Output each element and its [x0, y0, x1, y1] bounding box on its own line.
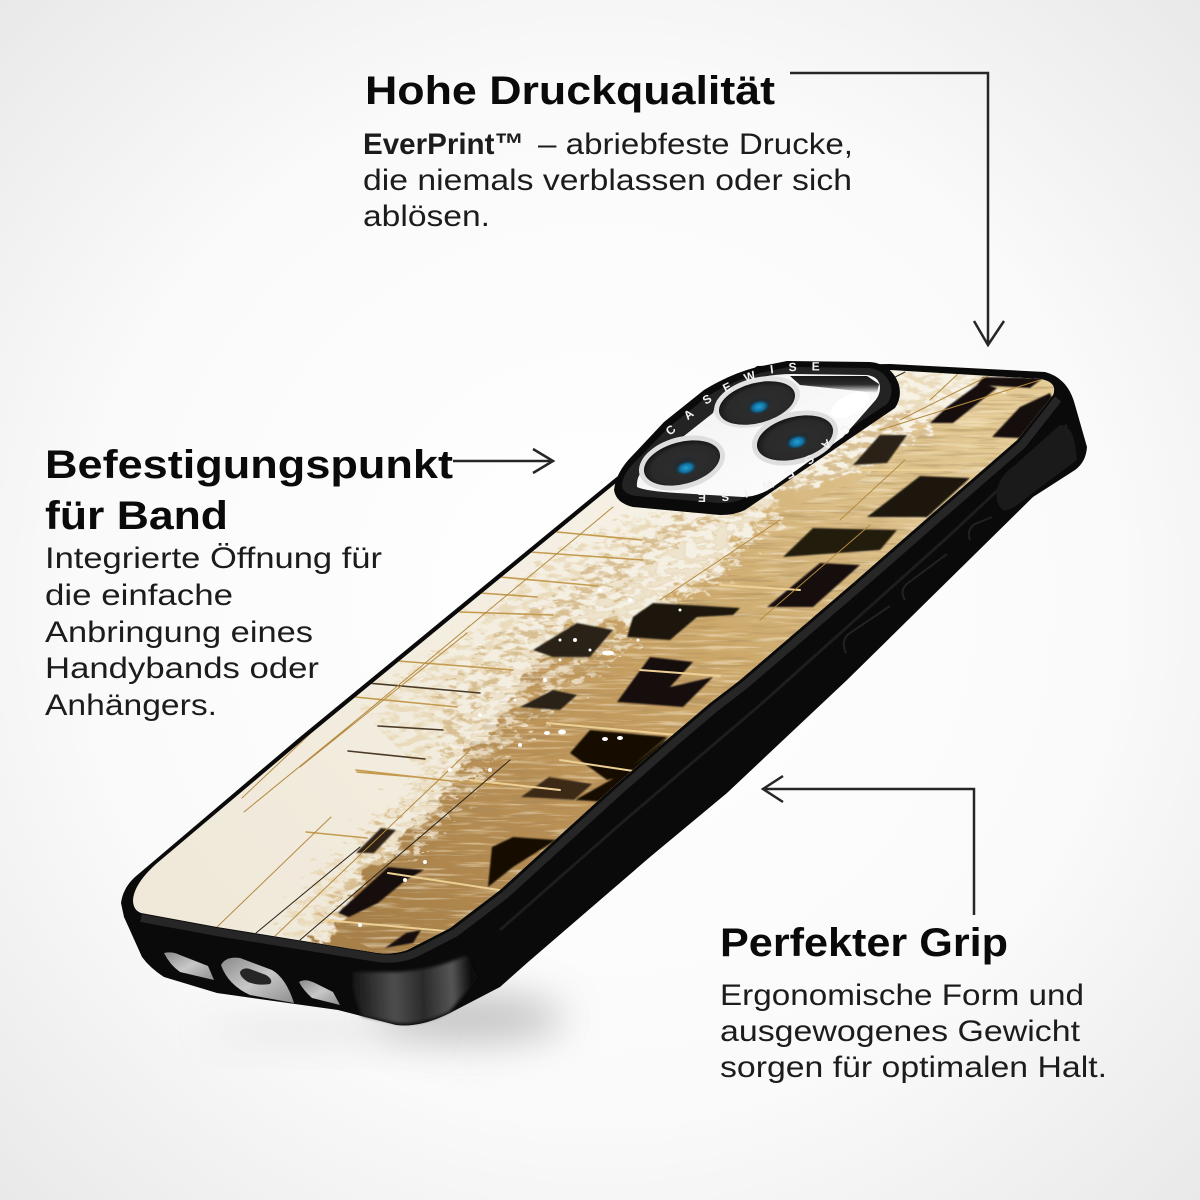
camera bump	[614, 361, 900, 515]
dark blocks	[338, 377, 1053, 948]
dark horizontal strokes	[348, 683, 480, 759]
heading: Befestigungspunkt für Band	[45, 443, 453, 538]
light streaks	[330, 380, 1070, 970]
charging port	[221, 958, 294, 1003]
text block: Befestigungspunkt: Handybands oder	[45, 652, 319, 685]
window top shadow	[790, 376, 879, 393]
text block: Befestigungspunkt: Integrierte Öffnung für	[45, 542, 382, 575]
bump frame	[614, 361, 900, 515]
side band next to the art	[141, 399, 1058, 959]
side buttons	[844, 517, 992, 653]
ring text bottom: CASEWISE	[698, 427, 850, 502]
text block: Perfekter Grip	[720, 979, 1107, 1084]
white flecks over the paint edge	[380, 490, 790, 860]
clear lens window	[637, 374, 880, 497]
side grip	[997, 425, 1077, 510]
white paint splatter	[358, 588, 682, 927]
brown streaks	[330, 380, 1070, 970]
gold paint area	[300, 365, 1070, 970]
heading: Perfekter Grip: Perfekter Grip	[720, 921, 1008, 965]
arrow: strap attachment	[453, 449, 553, 473]
text block: EverPrint: ablösen.	[363, 200, 490, 233]
top lens	[708, 367, 806, 437]
text block: Befestigungspunkt: die einfache	[45, 579, 233, 612]
side groove	[500, 425, 1067, 930]
volume up	[903, 554, 947, 600]
text block: Perfekter Grip: ausgewogenes Gewicht	[720, 1015, 1081, 1048]
gold and dark thin lines	[217, 372, 1040, 940]
pale transition paint	[280, 370, 1070, 960]
bump top bevel	[622, 367, 892, 503]
left speaker	[164, 952, 214, 980]
text block: EverPrint	[363, 128, 853, 233]
right speaker	[299, 980, 340, 1005]
heading: Befestigungspunkt für Band: Befestigungspunkt	[45, 443, 453, 487]
gold horizontal strokes	[306, 532, 643, 838]
cream base	[133, 370, 1054, 954]
text block: EverPrint: die niemals verblassen oder sich	[363, 164, 852, 197]
text block: Befestigungspunkt: Anbringung eines	[45, 616, 313, 649]
text block: Perfekter Grip: sorgen für optimalen Halt.	[720, 1051, 1107, 1084]
right lens	[746, 401, 844, 475]
ring text top: CASEWISE	[666, 362, 820, 434]
phone artwork	[133, 370, 1054, 954]
case body	[121, 364, 1087, 1026]
action button	[969, 517, 992, 540]
text block: Befestigungspunkt: Anhängers.	[45, 689, 217, 722]
phone drop shadow	[210, 994, 565, 1042]
arrow: print quality	[790, 73, 1004, 345]
heading: Befestigungspunkt für Band: für Band	[45, 494, 228, 538]
thin dark diagonals	[256, 372, 905, 940]
light gold strokes	[324, 470, 960, 933]
heading: Hohe Druckqualität: Hohe Druckqualität	[365, 69, 775, 113]
thin gold diagonals	[217, 372, 1040, 937]
phone case illustration	[121, 364, 1087, 1026]
flash	[827, 386, 873, 424]
text block: EverPrint: – abriebfeste Drucke,	[538, 128, 853, 161]
tan mottled paint	[320, 410, 1000, 960]
arrow: grip	[763, 776, 974, 915]
text block: Befestigungspunkt	[45, 542, 382, 722]
volume down	[844, 606, 890, 653]
text block: Perfekter Grip: Ergonomische Form und	[720, 979, 1084, 1012]
left lens	[633, 426, 731, 500]
text block: EverPrint: EverPrint™	[363, 128, 524, 161]
case corner highlight	[352, 955, 478, 1024]
